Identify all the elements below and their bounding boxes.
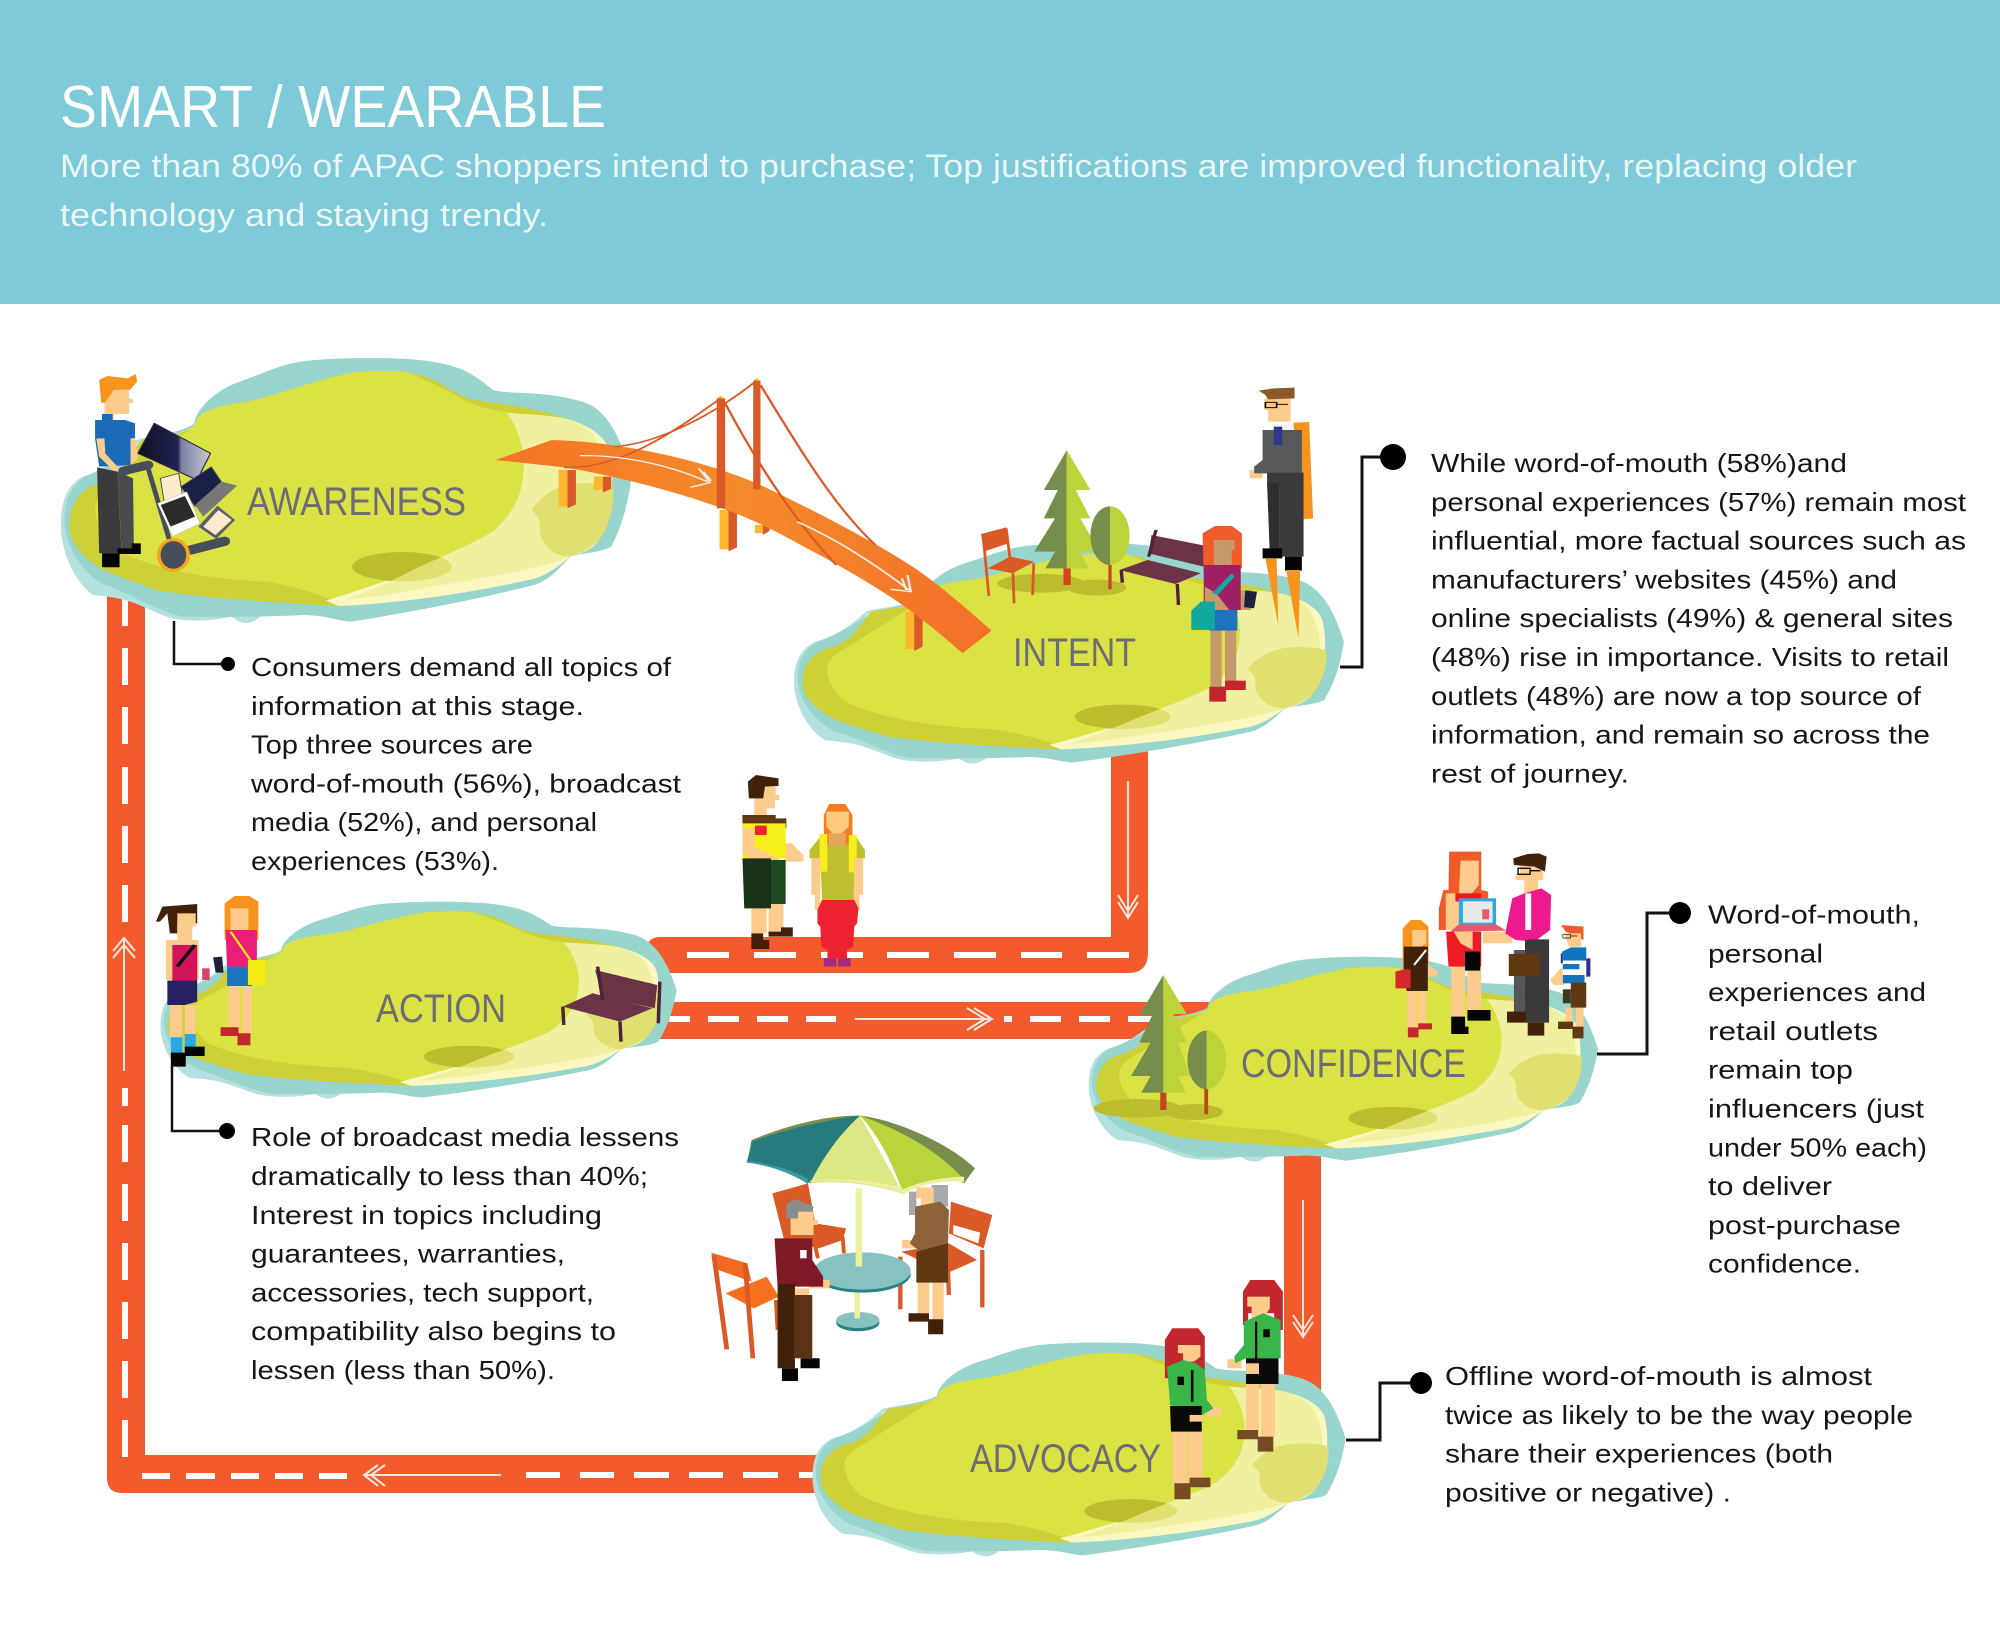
text: advocacy xyxy=(1445,1361,1913,1507)
text: action: Role of broadcast media lessens xyxy=(251,1122,679,1152)
text: intent: (48%) rise in importance. Visits to retail xyxy=(1431,642,1949,672)
icon: laptop xyxy=(1450,898,1506,932)
label: intent: INTENT xyxy=(1013,631,1136,675)
old woman xyxy=(902,1185,949,1334)
text: action: dramatically to less than 40%; xyxy=(251,1161,648,1191)
island: intent xyxy=(794,543,1344,764)
text: action: accessories, tech support, xyxy=(251,1277,594,1307)
icon: bench xyxy=(1120,530,1206,605)
girl with ponytail xyxy=(156,904,210,1067)
callout: action xyxy=(172,1066,235,1139)
intent scene: chair, trees, bench, people xyxy=(981,388,1313,702)
text: intent: rest of journey. xyxy=(1431,758,1629,788)
girl with yellow bag xyxy=(213,896,266,1045)
text: confidence: remain top xyxy=(1708,1055,1853,1085)
text: confidence: retail outlets xyxy=(1708,1016,1878,1046)
callout: advocacy xyxy=(1346,1372,1432,1440)
woman left xyxy=(1165,1328,1221,1499)
umbrella cafe scene xyxy=(711,1116,992,1381)
icon: pine tree xyxy=(1034,450,1100,585)
woman in red trousers xyxy=(810,804,865,967)
text: intent: information, and remain so across the xyxy=(1431,720,1930,750)
icon: right chair xyxy=(900,1202,992,1309)
text: intent: influential, more factual sources such as xyxy=(1431,526,1966,556)
woman right xyxy=(1227,1280,1283,1452)
icon: umbrella canopy xyxy=(746,1116,975,1194)
road arrows xyxy=(113,781,1313,1486)
text: advocacy: share their experiences (both xyxy=(1445,1439,1833,1469)
text: intent: outlets (48%) are now a top source of xyxy=(1431,681,1922,711)
icon: round tree xyxy=(1187,1031,1226,1114)
text: awareness: Top three sources are xyxy=(251,730,533,760)
text: intent: online specialists (49%) & general sites xyxy=(1431,603,1953,633)
man with briefcase xyxy=(1483,853,1551,1036)
icon: bench xyxy=(563,967,660,1042)
text: action xyxy=(251,1122,679,1385)
subtitle: technology and staying trendy. xyxy=(60,197,548,233)
label: action: ACTION xyxy=(376,987,506,1031)
text: confidence: confidence. xyxy=(1708,1249,1861,1279)
text: confidence: post-purchase xyxy=(1708,1210,1901,1240)
bridge deck xyxy=(496,440,992,653)
text: confidence xyxy=(1708,900,1927,1279)
small girl xyxy=(1395,920,1437,1037)
text: awareness: media (52%), and personal xyxy=(251,807,597,837)
text: awareness: experiences (53%). xyxy=(251,846,499,876)
suspension bridge xyxy=(496,378,992,653)
road dashes xyxy=(122,598,1159,1479)
label: awareness: AWARENESS xyxy=(247,480,466,524)
action scene: two girls and bench xyxy=(156,896,660,1067)
old man xyxy=(775,1199,830,1381)
text: confidence: Word-of-mouth, xyxy=(1708,900,1920,930)
text: advocacy: Offline word-of-mouth is almost xyxy=(1445,1361,1873,1391)
woman in red with laptop xyxy=(1439,852,1506,1034)
text: confidence: personal xyxy=(1708,938,1823,968)
text: confidence: experiences and xyxy=(1708,977,1926,1007)
text: confidence: influencers (just xyxy=(1708,1094,1925,1124)
text: intent: personal experiences (57%) remain most xyxy=(1431,487,1967,517)
text: awareness: Consumers demand all topics of xyxy=(251,652,672,682)
icon: table xyxy=(814,1188,911,1331)
awareness man with trolley of devices xyxy=(95,374,237,570)
icon: round tree xyxy=(1090,506,1130,589)
bridge arrows xyxy=(580,456,911,592)
text: action: guarantees, warranties, xyxy=(251,1239,565,1269)
text: awareness xyxy=(250,652,682,876)
text: confidence: to deliver xyxy=(1708,1171,1832,1201)
island: awareness xyxy=(61,358,632,623)
text: awareness: word-of-mouth (56%), broadcast xyxy=(250,768,682,798)
icon: chair xyxy=(981,527,1034,603)
man in yellow shirt xyxy=(742,775,804,949)
stage labels xyxy=(247,480,1466,1481)
callout: intent xyxy=(1340,444,1406,667)
text: awareness: information at this stage. xyxy=(251,691,584,721)
callout: confidence xyxy=(1597,902,1691,1054)
island: action xyxy=(160,902,677,1099)
man with jetpack xyxy=(1250,388,1313,638)
label: advocacy: ADVOCACY xyxy=(970,1437,1161,1481)
island: confidence xyxy=(1089,957,1598,1162)
text: action: lessen (less than 50%). xyxy=(251,1355,555,1385)
text: intent: manufacturers’ websites (45%) and xyxy=(1431,564,1897,594)
header band xyxy=(0,0,2000,304)
woman with teal bag xyxy=(1191,526,1257,702)
text: advocacy: twice as likely to be the way people xyxy=(1445,1400,1913,1430)
text: intent xyxy=(1431,448,1967,788)
subtitle: More than 80% of APAC shoppers intend to purchase; Top justifications are improved functionality, replacing older xyxy=(60,148,1857,184)
icon: pine tree xyxy=(1131,975,1190,1110)
advocacy scene: two women in green xyxy=(1165,1280,1283,1499)
text: action: Interest in topics including xyxy=(251,1200,602,1230)
text: intent: While word-of-mouth (58%)and xyxy=(1431,448,1847,478)
couple standing on road xyxy=(742,775,865,967)
text: confidence: under 50% each) xyxy=(1708,1132,1927,1162)
subtitle xyxy=(60,148,1857,233)
label: confidence: CONFIDENCE xyxy=(1241,1042,1466,1086)
boy with backpack xyxy=(1550,925,1590,1038)
text: action: compatibility also begins to xyxy=(251,1316,616,1346)
title: SMART / WEARABLE xyxy=(60,74,606,140)
callout: awareness xyxy=(174,621,235,671)
icon: front chair xyxy=(711,1253,779,1358)
road network xyxy=(107,580,1321,1493)
island: advocacy xyxy=(813,1343,1345,1556)
confidence scene: trees and family xyxy=(1094,852,1590,1120)
icon: back chair xyxy=(772,1183,846,1258)
text: advocacy: positive or negative) . xyxy=(1445,1477,1731,1507)
bridge towers and cables xyxy=(564,378,876,565)
